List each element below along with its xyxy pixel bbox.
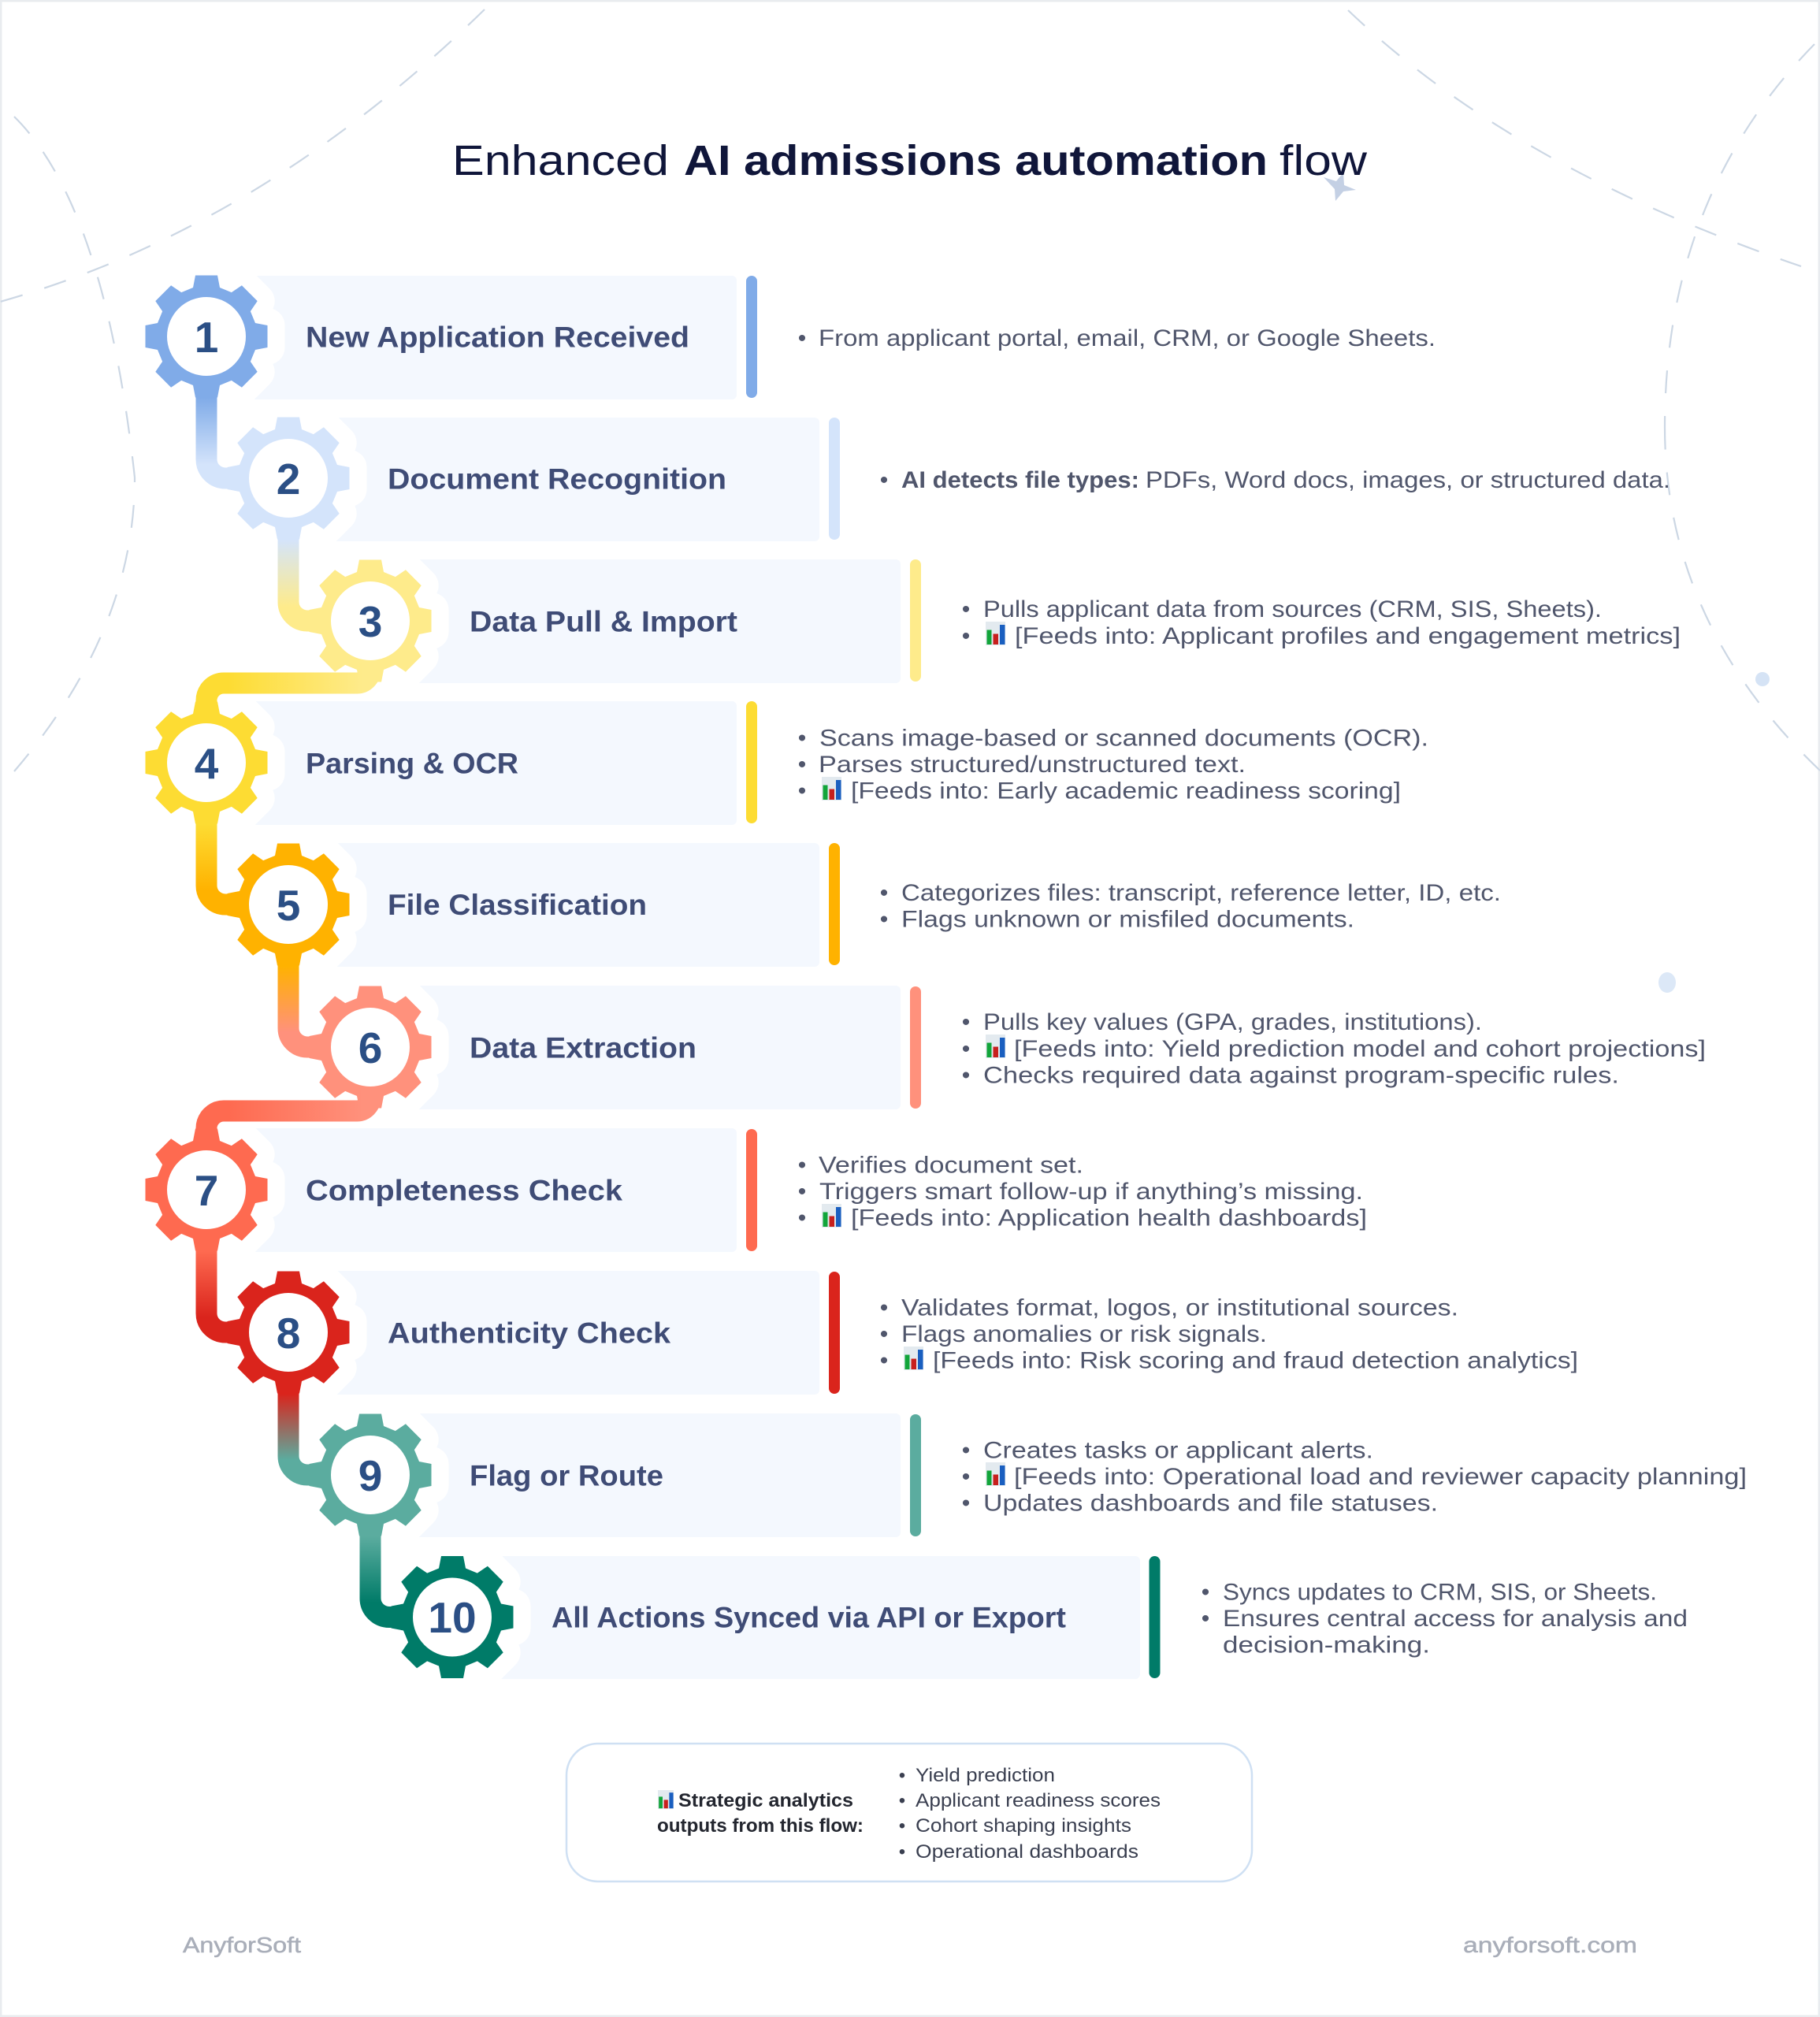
description: • <box>798 752 806 778</box>
description: Checks required data against program-specific rules. <box>983 1063 1619 1089</box>
panel <box>318 418 819 541</box>
callout list: Yield prediction <box>916 1765 1055 1786</box>
panel <box>236 1128 737 1252</box>
gear icon 4: 4 <box>195 739 219 788</box>
callout heading <box>657 1790 864 1837</box>
gear halo <box>145 276 268 397</box>
panel <box>318 843 819 967</box>
title: flow <box>1280 137 1368 184</box>
gear icon 3 <box>309 559 432 682</box>
panel <box>400 559 901 683</box>
description: • <box>798 1205 806 1231</box>
description <box>962 596 1681 649</box>
description: Pulls key values (GPA, grades, institutions). <box>983 1009 1482 1035</box>
connector 2 to 3 <box>288 528 334 621</box>
description <box>1202 1579 1688 1659</box>
connector 4 to 5 <box>206 812 252 904</box>
gear icon 5 <box>227 843 350 966</box>
callout heading: Strategic analytics <box>678 1790 853 1811</box>
description: [Feeds into: Early academic readiness scoring] <box>851 778 1401 804</box>
step 2: Document Recognition <box>206 386 1670 541</box>
gear halo <box>309 559 432 682</box>
color bar <box>829 843 840 965</box>
step title: Data Pull & Import <box>470 605 737 638</box>
description: • <box>962 1036 970 1062</box>
description: Triggers smart follow-up if anything’s missing. <box>819 1179 1363 1205</box>
description: • <box>962 623 970 649</box>
connector 6 to 7 <box>206 1090 370 1148</box>
description: Creates tasks or applicant alerts. <box>983 1437 1373 1463</box>
gear icon 9: 9 <box>358 1451 382 1500</box>
gear icon 2: 2 <box>277 455 300 503</box>
description <box>962 1437 1747 1517</box>
description: [Feeds into: Applicant profiles and engagement metrics] <box>1015 623 1681 649</box>
callout list: Cohort shaping insights <box>916 1815 1131 1837</box>
description: • <box>962 596 970 622</box>
step title: Parsing & OCR <box>306 747 518 780</box>
step title: Flag or Route <box>470 1459 663 1492</box>
description: Flags anomalies or risk signals. <box>901 1321 1267 1347</box>
connector 5 to 6 <box>288 954 334 1047</box>
description: Updates dashboards and file statuses. <box>983 1491 1438 1517</box>
step title: Document Recognition <box>388 463 726 495</box>
step 9: Flag or Route <box>288 1381 1747 1537</box>
gear halo <box>391 1556 514 1678</box>
footer website: anyforsoft.com <box>1463 1933 1637 1957</box>
footer brand: AnyforSoft <box>183 1933 301 1957</box>
description: Validates format, logos, or institutional sources. <box>901 1295 1458 1321</box>
description: • <box>798 1152 806 1178</box>
color bar <box>829 418 840 540</box>
decorative dot <box>1755 672 1770 686</box>
gear icon 10 <box>391 1556 514 1678</box>
color bar <box>746 276 757 398</box>
gear halo <box>309 986 432 1108</box>
gear icon 7 <box>145 1128 268 1251</box>
gear icon 1: 1 <box>195 313 218 362</box>
callout: strategic analytics outputs <box>566 1744 1252 1881</box>
gear icon 2 <box>227 418 350 539</box>
gear halo <box>227 843 350 966</box>
description: [Feeds into: Yield prediction model and cohort projections] <box>1014 1036 1706 1062</box>
description: • <box>798 1179 806 1205</box>
gear icon 8 <box>227 1272 350 1393</box>
gear halo <box>227 1272 350 1393</box>
description: • <box>1202 1579 1209 1605</box>
gear halo <box>227 418 350 539</box>
gear icon 4 <box>145 701 268 824</box>
description: Verifies document set. <box>819 1152 1083 1178</box>
step title: New Application Received <box>306 321 689 353</box>
connector 7 to 8 <box>206 1239 252 1332</box>
description <box>798 725 1428 804</box>
callout list: Operational dashboards <box>916 1841 1138 1863</box>
description <box>880 467 1670 493</box>
decorative star <box>1324 173 1356 201</box>
description: Pulls applicant data from sources (CRM, SIS, Sheets). <box>983 596 1602 622</box>
panel <box>236 276 737 399</box>
panel <box>482 1556 1140 1679</box>
description: • <box>962 1491 970 1517</box>
gear icon 9 <box>309 1413 432 1536</box>
connector 3 to 4 <box>206 663 370 721</box>
callout list <box>899 1765 1161 1863</box>
description: • <box>798 778 806 804</box>
description <box>962 1009 1706 1089</box>
panel <box>318 1271 819 1395</box>
gear icon 6 <box>309 986 432 1108</box>
callout heading: outputs from this flow: <box>657 1815 864 1837</box>
description <box>880 1295 1578 1374</box>
color bar <box>746 1129 757 1251</box>
step 10: All Actions Synced via API or Export <box>370 1524 1688 1679</box>
step title: All Actions Synced via API or Export <box>552 1601 1066 1634</box>
gear icon 3: 3 <box>358 597 382 646</box>
description: • <box>962 1063 970 1089</box>
step 8: Authenticity Check <box>206 1239 1578 1395</box>
gear halo <box>145 701 268 824</box>
gear icon 6: 6 <box>358 1023 382 1072</box>
description: • <box>962 1437 970 1463</box>
description: • <box>962 1009 970 1035</box>
description: PDFs, Word docs, images, or structured data. <box>1146 467 1670 493</box>
step title: Authenticity Check <box>388 1317 670 1349</box>
step 3: Data Pull & Import <box>288 528 1681 683</box>
step 7: Completeness Check <box>145 1090 1367 1252</box>
step 1: New Application Received <box>145 276 1436 399</box>
description <box>880 880 1501 933</box>
description: • <box>798 725 806 751</box>
callout list: • <box>899 1815 905 1837</box>
description: Ensures central access for analysis and <box>1223 1606 1688 1632</box>
step 6: Data Extraction <box>288 954 1706 1109</box>
description: From applicant portal, email, CRM, or Google Sheets. <box>819 325 1436 351</box>
description: • <box>880 880 888 906</box>
callout list: • <box>899 1790 905 1811</box>
description: • <box>880 467 888 493</box>
color bar <box>910 1414 921 1536</box>
step title: Data Extraction <box>470 1032 696 1064</box>
description: • <box>962 1464 970 1490</box>
description: Scans image-based or scanned documents (OCR). <box>819 725 1428 751</box>
description: [Feeds into: Risk scoring and fraud detection analytics] <box>933 1348 1578 1374</box>
gear icon 7: 7 <box>195 1166 218 1215</box>
description: [Feeds into: Application health dashboards] <box>851 1205 1367 1231</box>
description: • <box>880 1295 888 1321</box>
step 4: Parsing & OCR <box>145 663 1428 825</box>
panel <box>400 1413 901 1537</box>
gear icon 10: 10 <box>428 1593 477 1642</box>
description: Parses structured/unstructured text. <box>819 752 1246 778</box>
color bar <box>746 701 757 823</box>
connector 9 to 10 <box>370 1524 416 1617</box>
callout list: • <box>899 1765 905 1786</box>
step 5: File Classification <box>206 812 1501 967</box>
callout box <box>566 1744 1252 1881</box>
panel <box>400 986 901 1109</box>
description: [Feeds into: Operational load and reviewer capacity planning] <box>1014 1464 1747 1490</box>
gear halo <box>145 1128 268 1251</box>
description: • <box>1202 1606 1209 1632</box>
gear icon 5: 5 <box>277 881 300 930</box>
connector 8 to 9 <box>288 1381 334 1475</box>
step title: File Classification <box>388 889 647 921</box>
description: • <box>880 1321 888 1347</box>
description: Categorizes files: transcript, reference letter, ID, etc. <box>901 880 1501 906</box>
description: • <box>880 907 888 933</box>
description: AI detects file types: <box>901 467 1139 493</box>
description: Syncs updates to CRM, SIS, or Sheets. <box>1223 1579 1657 1605</box>
description: • <box>880 1348 888 1374</box>
panel <box>236 701 737 825</box>
gear icon 8: 8 <box>277 1309 300 1358</box>
title: Enhanced <box>452 137 669 184</box>
color bar <box>829 1272 840 1394</box>
callout list: • <box>899 1841 905 1863</box>
callout list: Applicant readiness scores <box>916 1790 1161 1811</box>
title <box>452 137 1368 184</box>
description <box>798 1152 1367 1231</box>
description: decision-making. <box>1223 1633 1430 1659</box>
step title: Completeness Check <box>306 1174 622 1207</box>
gear icon 1 <box>145 276 268 397</box>
color bar <box>910 559 921 682</box>
connector 1 to 2 <box>206 386 252 478</box>
decorative oval <box>1658 972 1676 993</box>
color bar <box>1149 1556 1160 1678</box>
description: Flags unknown or misfiled documents. <box>901 907 1354 933</box>
color bar <box>910 986 921 1109</box>
gear halo <box>309 1413 432 1536</box>
description: • <box>798 325 806 351</box>
title: AI admissions automation <box>684 137 1268 184</box>
